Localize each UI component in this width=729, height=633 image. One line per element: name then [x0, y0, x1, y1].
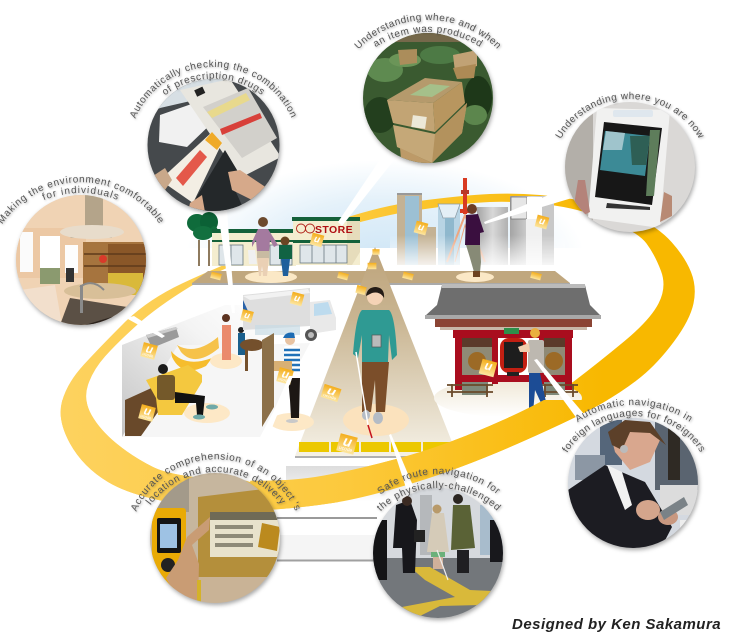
tag: city left	[414, 221, 428, 235]
caption: comfortable environment: Making the environment comfortable	[0, 176, 164, 225]
ucode tags	[138, 215, 549, 455]
tag: road 4	[530, 272, 542, 280]
room	[122, 305, 310, 437]
photo: guided walk	[373, 488, 505, 620]
tag: parcel	[276, 366, 294, 385]
tree	[187, 212, 218, 266]
caption: prescription drugs: Automatically checking the combination	[130, 60, 298, 120]
tag: walkway: u	[326, 383, 338, 398]
tag: air conditioner	[140, 341, 158, 360]
photo: prescription drugs	[147, 79, 281, 213]
caption: foreign language navigation: foreign languages for foreigners	[562, 410, 706, 454]
tag: room top	[240, 309, 254, 323]
caption: delivery: location and accurate delivery	[145, 466, 286, 506]
tag: store	[310, 233, 324, 247]
temple gate	[425, 284, 601, 417]
tag: walkway: ucode	[323, 392, 337, 401]
photo: kitchen	[16, 195, 146, 325]
lantern	[500, 338, 527, 373]
photo: produce boxes	[362, 32, 494, 170]
tag: air conditioner: ucode	[142, 351, 155, 359]
tag: room top: u	[243, 310, 252, 321]
horizontal road	[192, 271, 570, 285]
foreign visitor	[518, 328, 546, 413]
warm air arrows	[171, 337, 219, 370]
tag: bookcase: u	[142, 404, 153, 419]
tag: tile: ucode	[338, 445, 353, 454]
tag: gate: u	[483, 358, 494, 374]
caption: delivery: Accurate comprehension of an object 's	[131, 452, 302, 513]
tag: road 5	[372, 249, 380, 255]
bookcase	[125, 385, 158, 436]
city skyline	[397, 193, 554, 265]
tag: store: u	[313, 234, 321, 246]
tag: city right	[535, 215, 549, 229]
tag: truck	[290, 292, 304, 306]
floor spot	[184, 403, 230, 423]
photo: handheld navigator	[565, 102, 695, 232]
store	[212, 217, 360, 266]
caption: safe route	[376, 468, 503, 512]
delivery truck	[243, 288, 336, 341]
red frame	[453, 330, 573, 338]
tag: road 1	[210, 272, 222, 280]
caption: production origin: Understanding where and when	[354, 13, 502, 50]
caption: safe route: the physically-challenged	[376, 480, 503, 512]
tag: walkway	[321, 382, 342, 402]
ring passing in front of the scene	[60, 400, 608, 510]
woman and child	[210, 314, 245, 369]
store sign: STORE	[315, 224, 353, 236]
tag: gate	[479, 357, 498, 377]
vertical road	[295, 247, 455, 458]
tag: parcel: u	[280, 367, 291, 382]
man using terminal on road	[456, 204, 494, 282]
leader wedges	[126, 158, 596, 488]
tag: city left: u	[417, 222, 425, 234]
tag: air conditioner: u	[144, 342, 155, 357]
walking man with cane	[343, 287, 409, 438]
sky backdrop	[150, 130, 620, 248]
tactile paving	[299, 442, 452, 452]
woman with child at store	[245, 217, 297, 283]
door	[262, 333, 274, 427]
tag: road 6	[368, 263, 376, 269]
tag: road 7	[355, 285, 367, 295]
tag: tile: u	[341, 433, 354, 451]
air conditioner	[146, 327, 179, 348]
photo: parcel scanner	[149, 472, 282, 605]
building fade	[390, 235, 565, 271]
caption: comfortable environment: for individuals	[42, 186, 120, 202]
steps below road	[277, 466, 456, 562]
caption: current location: Understanding where you are now	[555, 92, 705, 140]
caption: production origin: an item was produced	[374, 26, 484, 48]
table	[240, 339, 264, 371]
tag: city right: u	[538, 216, 546, 228]
roof	[425, 285, 601, 316]
tag: road 2	[337, 272, 349, 280]
photo: foreign visitor	[568, 418, 698, 550]
yellow orbit ring	[61, 194, 695, 510]
tag: parcel: ucode	[278, 376, 291, 384]
tag: road 3	[402, 272, 414, 280]
delivery man	[270, 333, 314, 431]
caption: safe route: Safe route navigation for	[378, 468, 502, 496]
tag: bookcase: ucode	[140, 413, 153, 421]
caption: prescription drugs: of prescription drugs	[162, 72, 266, 96]
designer credit: Designed by Ken Sakamura	[512, 616, 721, 633]
yellow sofa	[146, 365, 202, 415]
tag: tile	[336, 432, 358, 455]
tag: bookcase	[138, 403, 156, 422]
tag: truck: u	[293, 293, 301, 305]
tokyo tower	[447, 178, 485, 262]
fences	[447, 384, 578, 397]
seated man	[157, 364, 218, 420]
caption: foreign language navigation: Automatic navigation in	[576, 398, 694, 424]
